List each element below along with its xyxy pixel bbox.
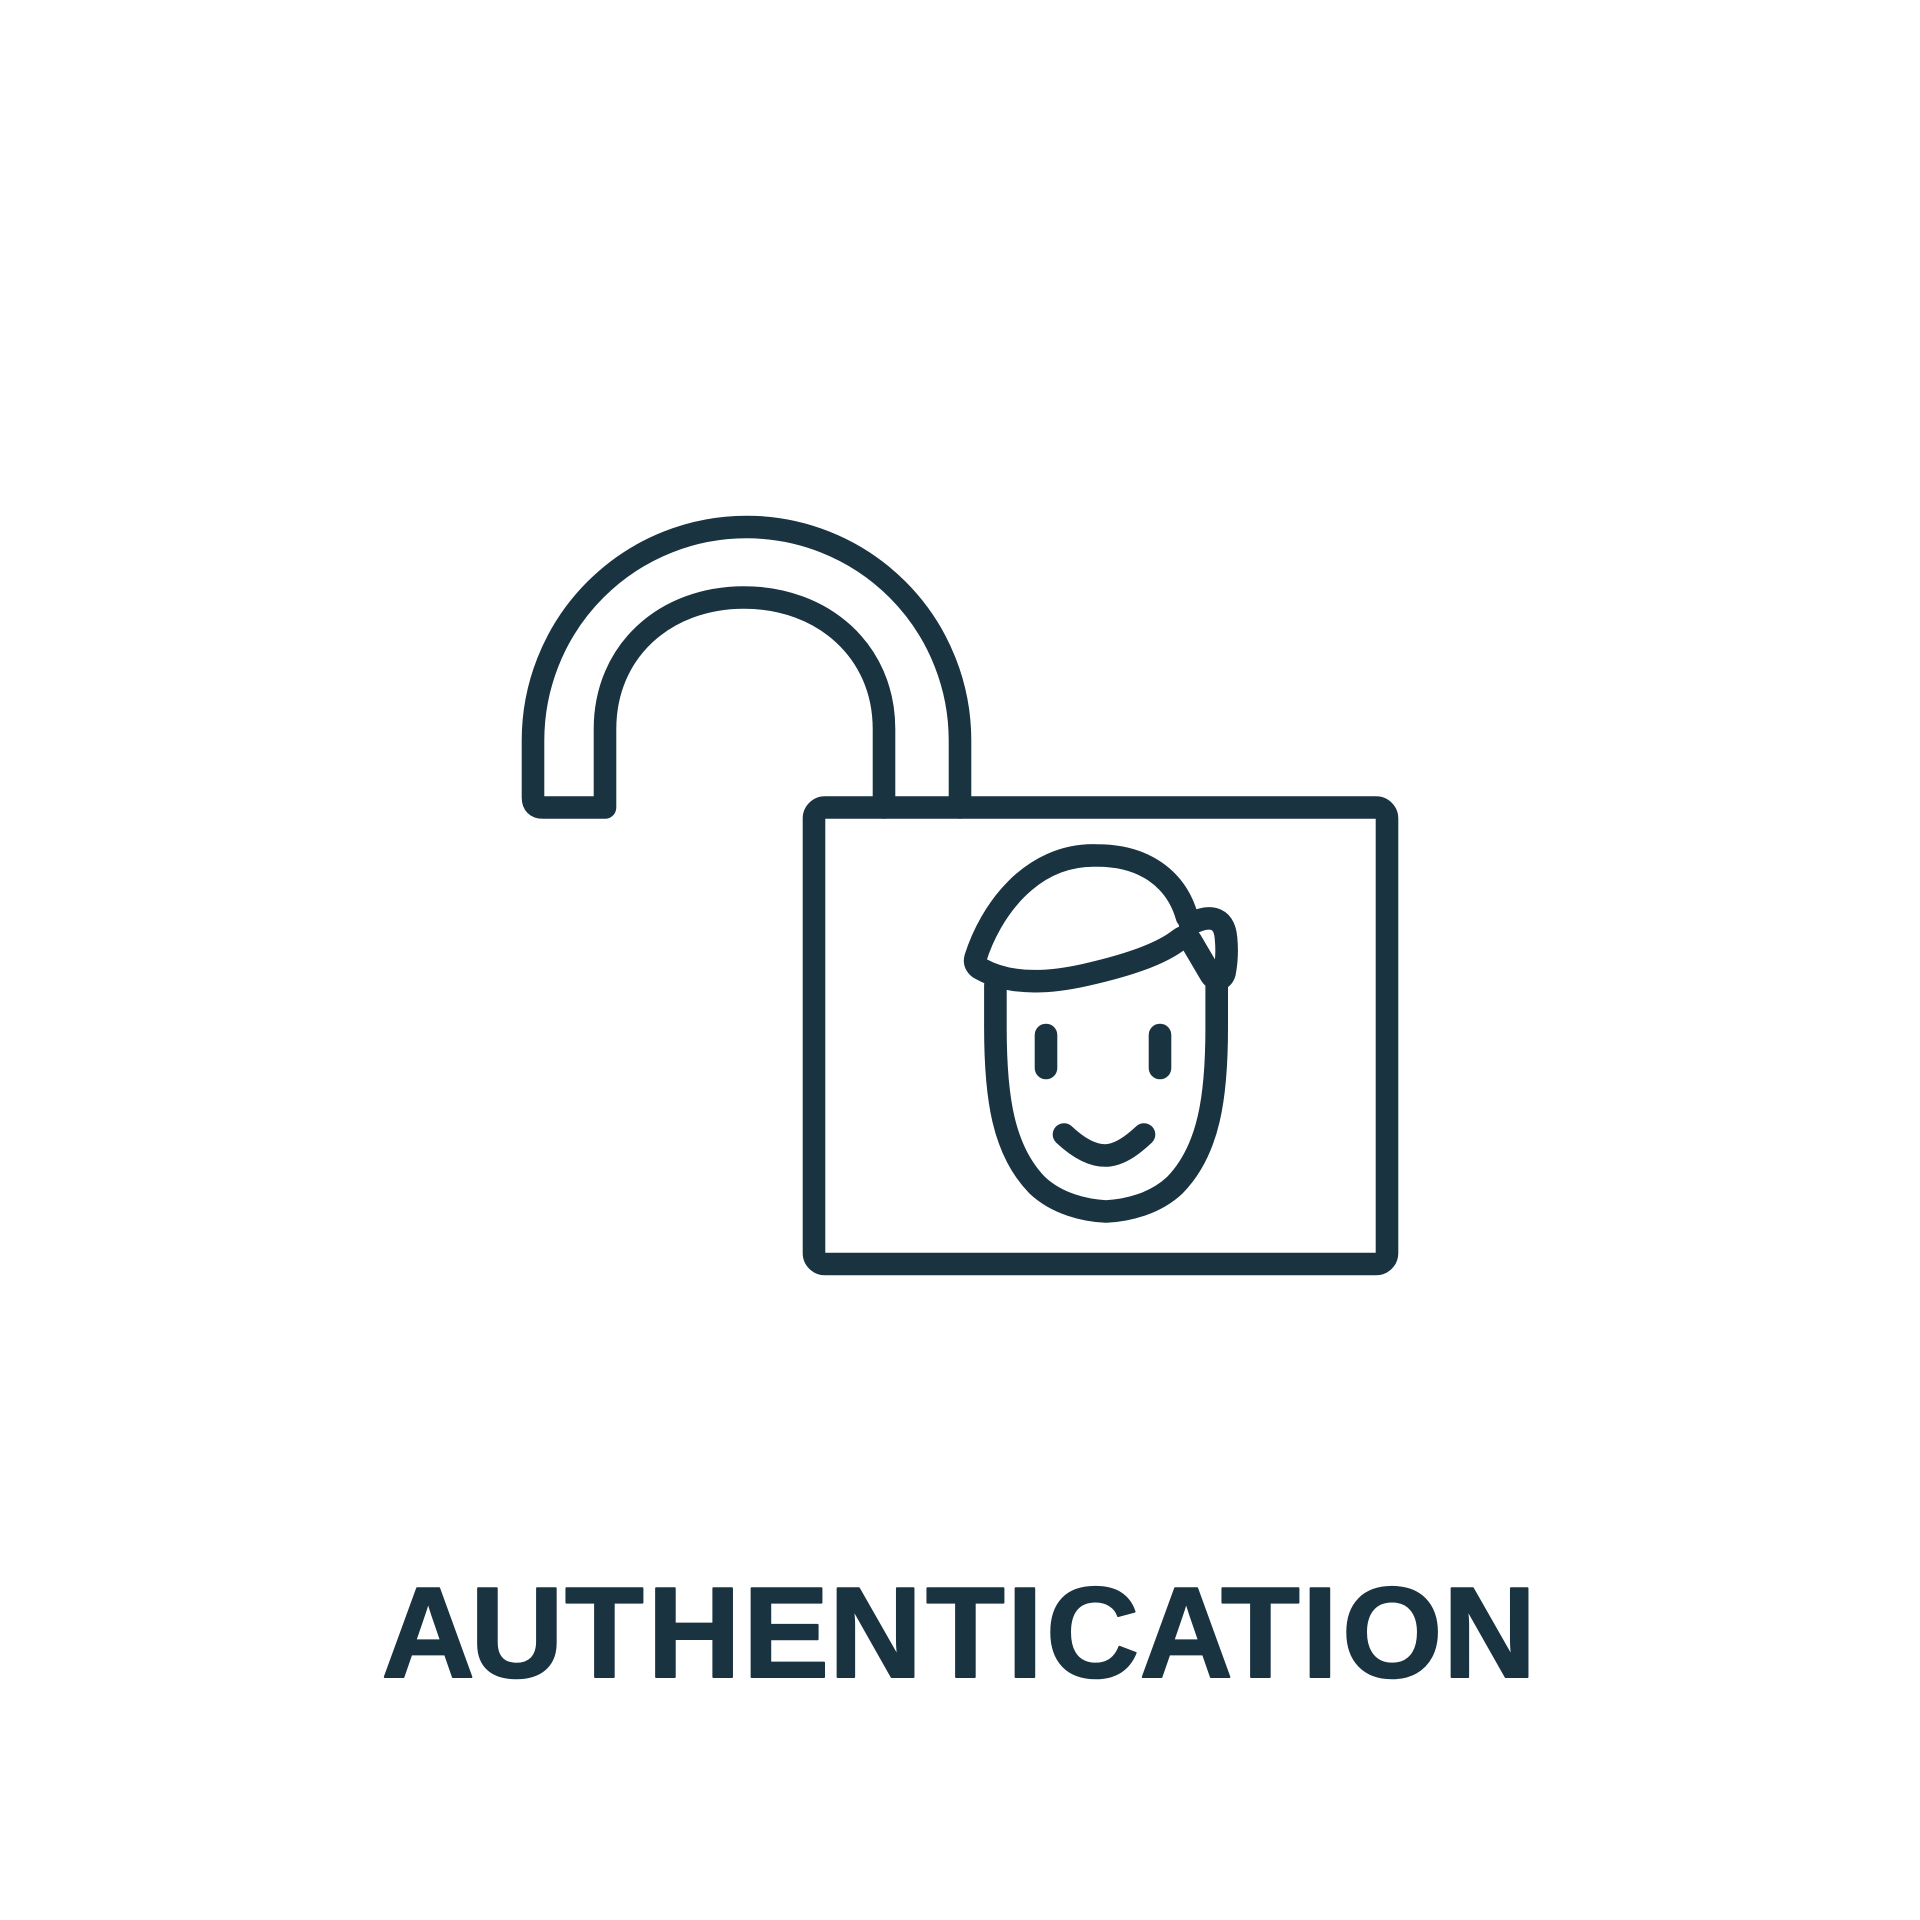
icon: padlock shackle bbox=[533, 527, 960, 808]
icon: smile bbox=[1064, 1134, 1144, 1156]
icon: open padlock with face bbox=[533, 527, 1387, 1264]
icon: head outline bbox=[995, 985, 1217, 1212]
icon: left eye bbox=[1035, 1035, 1057, 1068]
icon: padlock body bbox=[814, 808, 1387, 1264]
icon: right eye bbox=[1149, 1035, 1171, 1068]
icon: cap bbox=[975, 855, 1227, 981]
title: AUTHENTICATION bbox=[382, 1561, 1536, 1705]
